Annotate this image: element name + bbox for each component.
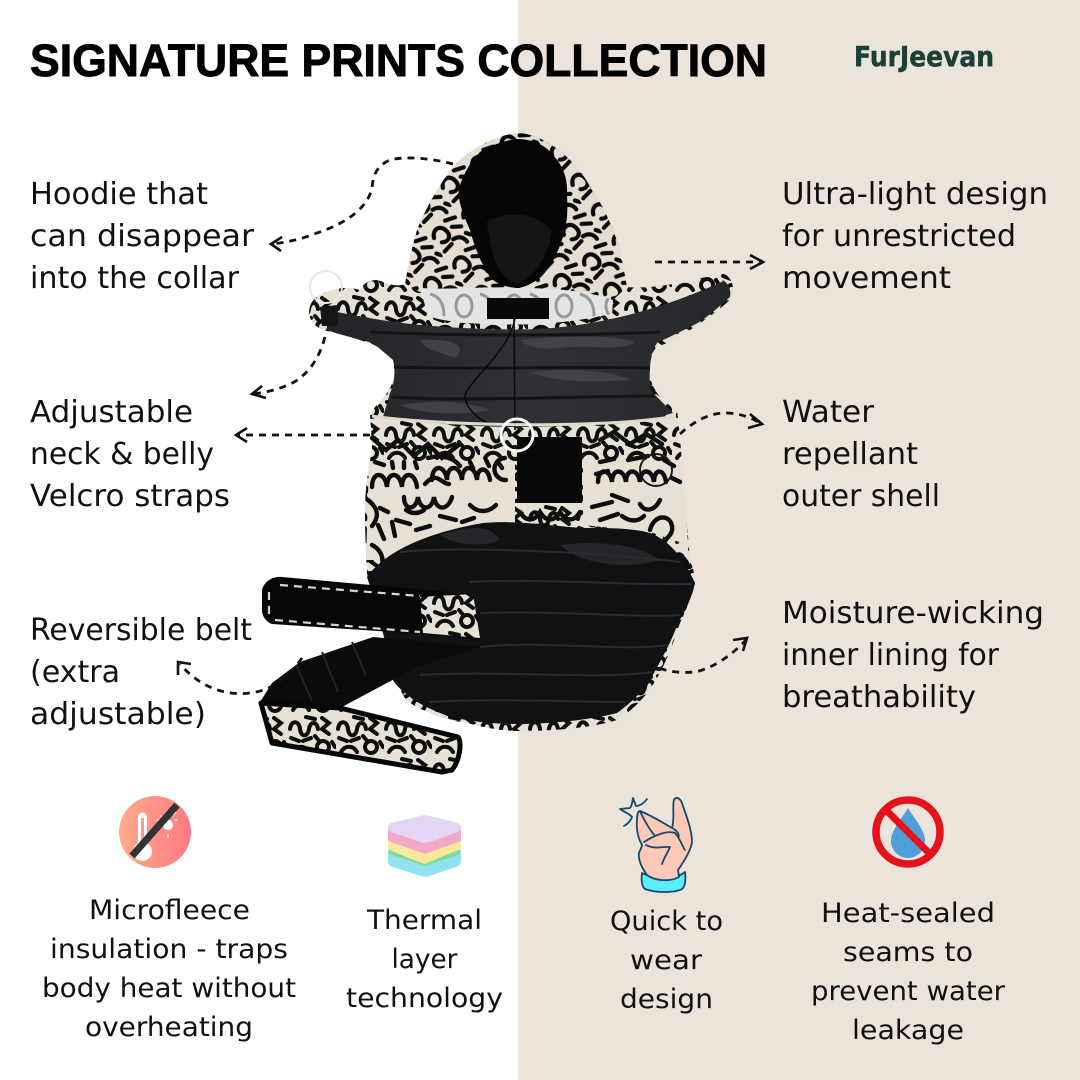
text: ultra-light: movement — [782, 261, 951, 296]
text: moisture-wicking: inner lining for — [782, 638, 1000, 673]
text: thermal layer: layer — [392, 944, 458, 975]
collar edge print — [330, 279, 722, 327]
text: thermal layer — [346, 905, 503, 1014]
text: moisture-wicking: Moisture-wicking — [782, 596, 1044, 631]
arrow: ultra-light label — [655, 255, 763, 269]
text: reversible belt: Reversible belt — [30, 613, 252, 648]
text: heat-sealed seams: seams to — [843, 937, 973, 968]
text: velcro straps: neck & belly — [30, 437, 214, 472]
left wing mesh — [320, 305, 338, 326]
product photo: dog jacket — [260, 133, 733, 772]
background: beige right half — [518, 0, 1080, 1080]
jacket printed outer shell — [309, 133, 733, 731]
belly velcro patch — [517, 437, 582, 503]
title: SIGNATURE PRINTS COLLECTION — [30, 35, 767, 86]
text: microfleece — [42, 895, 296, 1043]
belly printed panel with scallops — [366, 462, 515, 560]
text: heat-sealed seams: Heat-sealed — [821, 898, 995, 929]
arrow: moisture label — [640, 638, 747, 672]
text: hoodie: Hoodie that — [30, 177, 208, 212]
text: water repellant: Water — [782, 395, 875, 430]
upper belt printed patch — [420, 594, 480, 638]
belly printed panel right — [583, 462, 688, 545]
text: velcro straps: Adjustable — [30, 395, 193, 430]
circle marker: outer shell — [640, 454, 672, 486]
text: microfleece: overheating — [85, 1012, 253, 1043]
text: hoodie: can disappear — [30, 219, 255, 254]
hood inner lining — [459, 139, 567, 288]
lower belt printed end — [261, 703, 460, 772]
text: velcro straps: Velcro straps — [30, 479, 230, 514]
arrow: water repellant label — [680, 413, 762, 434]
text: quick to wear: Quick to — [610, 906, 723, 937]
text: reversible belt — [30, 613, 252, 732]
icon: crossed-out thermometer — [119, 796, 191, 868]
background: white left half — [0, 0, 518, 1080]
neck velcro strap — [487, 298, 549, 319]
lower lining highlights — [440, 528, 660, 565]
text: microfleece: insulation - traps — [50, 934, 288, 965]
text: water repellant: repellant — [782, 437, 918, 472]
lower reversible belt — [260, 637, 480, 708]
text: quick to wear: design — [620, 984, 713, 1015]
collar pale lining — [420, 287, 613, 326]
circle marker: belly strap — [501, 419, 533, 451]
text: hoodie — [30, 177, 255, 296]
jacket inner upper lining — [327, 280, 730, 427]
lower inner black lining — [367, 522, 695, 724]
icon: rainbow thermal layers — [388, 815, 461, 877]
icon: finger snap hand — [620, 798, 692, 892]
arrow: belly strap label — [236, 428, 370, 442]
text: moisture-wicking: breathability — [782, 680, 976, 715]
text: velcro straps — [30, 395, 230, 514]
text: microfleece: Microfleece — [89, 895, 250, 926]
text: ultra-light — [782, 177, 1048, 296]
drawstring cord — [465, 318, 515, 430]
arrow: hood to hoodie label — [271, 158, 453, 251]
lining highlight sheen — [400, 336, 635, 413]
upper reversible belt — [262, 577, 480, 640]
text: heat-sealed seams: prevent water — [811, 976, 1005, 1007]
text: quick to wear — [610, 906, 723, 1015]
text: heat-sealed seams — [811, 898, 1005, 1046]
text: heat-sealed seams: leakage — [852, 1015, 964, 1046]
lining seam lines — [370, 332, 660, 399]
bottom collar trim — [372, 416, 676, 425]
hood inner shading — [487, 215, 552, 284]
text: reversible belt: adjustable) — [30, 697, 206, 732]
text: quick to wear: wear — [630, 945, 702, 976]
text: ultra-light: for unrestricted — [782, 219, 1016, 254]
text: moisture-wicking — [782, 596, 1044, 715]
lower lining seams — [400, 550, 692, 702]
text: thermal layer: Thermal — [366, 905, 482, 936]
text: water repellant: outer shell — [782, 479, 940, 514]
text: ultra-light: Ultra-light design — [782, 177, 1048, 212]
icon: no water — [876, 800, 940, 864]
arrow: reversible belt label — [178, 658, 302, 694]
logo: FurJeevan: FurJeevan — [854, 40, 994, 73]
big printed doodles — [368, 432, 688, 566]
text: water repellant — [782, 395, 940, 514]
text: microfleece: body heat without — [42, 973, 296, 1004]
text: reversible belt: (extra — [30, 655, 120, 690]
upper belt stitching — [269, 585, 420, 632]
hood print — [405, 133, 627, 300]
circle marker: neck strap — [310, 271, 342, 303]
arrow: neck strap label — [252, 337, 325, 398]
text: hoodie: into the collar — [30, 261, 240, 296]
text: thermal layer: technology — [346, 983, 503, 1014]
lower belt quilting — [296, 642, 366, 701]
